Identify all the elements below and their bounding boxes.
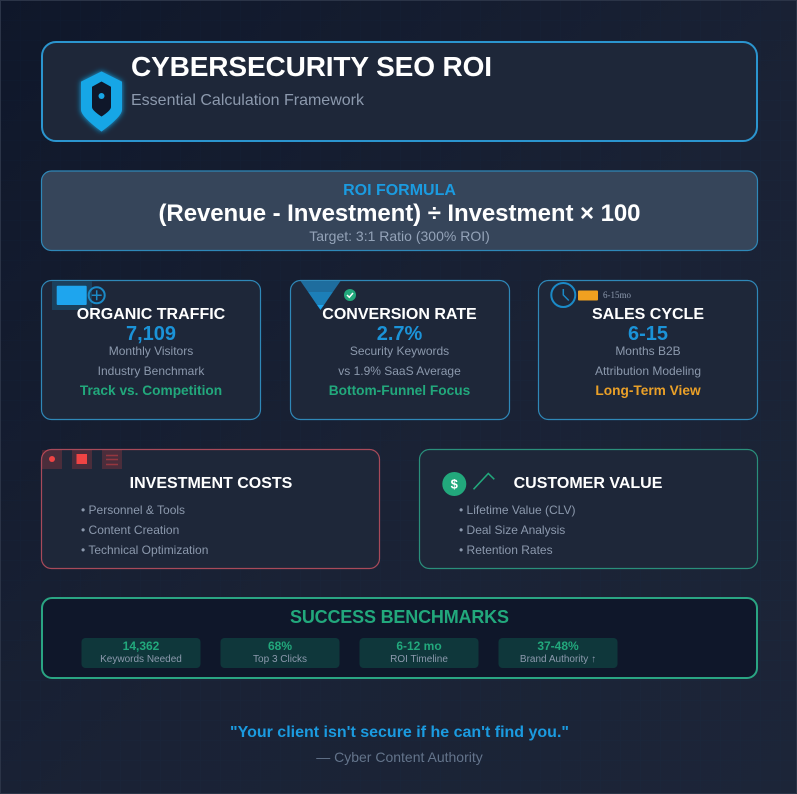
- panel: customer value: [420, 450, 758, 568]
- icon: shield: [82, 72, 122, 131]
- formula target: Target: 3:1 Ratio (300% ROI): [309, 228, 490, 244]
- icon: funnel: [300, 281, 340, 310]
- description: Security Keywords: [350, 344, 449, 358]
- panel: success benchmarks: [42, 598, 757, 678]
- value list: • Lifetime Value (CLV): [459, 503, 575, 517]
- subtitle: Essential Calculation Framework: [131, 92, 365, 109]
- metric: 2.7%: [377, 323, 423, 345]
- icon: clock: [551, 283, 575, 307]
- stat: timeline: [360, 638, 478, 668]
- stat: clicks: 68%: [268, 639, 292, 653]
- duration tag: [578, 290, 631, 300]
- card title: ORGANIC TRAFFIC: [77, 306, 226, 323]
- panel: header: [42, 42, 757, 141]
- description: Months B2B: [615, 344, 681, 358]
- metric: 6-15: [628, 323, 668, 345]
- panel: ROI formula: [42, 171, 758, 250]
- attribution: — Cyber Content Authority: [316, 749, 483, 765]
- stat: keywords: Keywords Needed: [100, 654, 182, 665]
- stat: timeline: ROI Timeline: [390, 654, 448, 665]
- panel: investment costs: [42, 450, 380, 568]
- value list: • Retention Rates: [459, 543, 553, 557]
- takeaway: Track vs. Competition: [80, 383, 222, 398]
- value list: [459, 503, 575, 557]
- card title: INVESTMENT COSTS: [130, 475, 293, 492]
- stat: brand authority: Brand Authority ↑: [520, 654, 596, 665]
- cost list: • Content Creation: [81, 523, 179, 537]
- icon: dollar coin: $: [451, 476, 459, 492]
- takeaway: Bottom-Funnel Focus: [329, 383, 471, 398]
- stat: clicks: [220, 638, 340, 668]
- metric: 7,109: [126, 323, 176, 345]
- panel: sales cycle: [538, 280, 758, 420]
- cost list: [81, 503, 208, 557]
- takeaway: Long-Term View: [595, 383, 701, 398]
- section heading: SUCCESS BENCHMARKS: [290, 607, 509, 627]
- icon: traffic window: [52, 282, 105, 310]
- benchmark note: vs 1.9% SaaS Average: [338, 364, 461, 378]
- formula: (Revenue - Investment) ÷ Investment × 100: [158, 200, 640, 227]
- value list: • Deal Size Analysis: [459, 523, 565, 537]
- stat: brand authority: [498, 638, 618, 668]
- panel: conversion rate: [290, 280, 510, 420]
- icon: trend line: [474, 474, 494, 489]
- card title: SALES CYCLE: [592, 306, 704, 323]
- stat: keywords: 14,362: [123, 639, 160, 653]
- stat: timeline: 6-12 mo: [396, 639, 442, 653]
- stat: brand authority: 37-48%: [537, 639, 579, 653]
- icon: check badge: [344, 289, 356, 301]
- formula heading: ROI FORMULA: [343, 182, 456, 199]
- title: CYBERSECURITY SEO ROI: [131, 51, 492, 82]
- icon: cost tiles: [42, 450, 122, 469]
- panel: organic traffic: [42, 280, 260, 420]
- benchmark note: Attribution Modeling: [595, 364, 701, 378]
- quote: "Your client isn't secure if he can't find you.": [230, 724, 569, 741]
- icon: dollar coin: [442, 472, 466, 496]
- duration tag: 6-15mo: [603, 290, 631, 300]
- cost list: • Personnel & Tools: [81, 503, 185, 517]
- card title: CONVERSION RATE: [322, 306, 477, 323]
- stat: clicks: Top 3 Clicks: [253, 654, 307, 665]
- description: Monthly Visitors: [109, 344, 193, 358]
- benchmark note: Industry Benchmark: [98, 364, 205, 378]
- card title: CUSTOMER VALUE: [514, 475, 663, 492]
- cost list: • Technical Optimization: [81, 543, 208, 557]
- stat: keywords: [82, 638, 200, 668]
